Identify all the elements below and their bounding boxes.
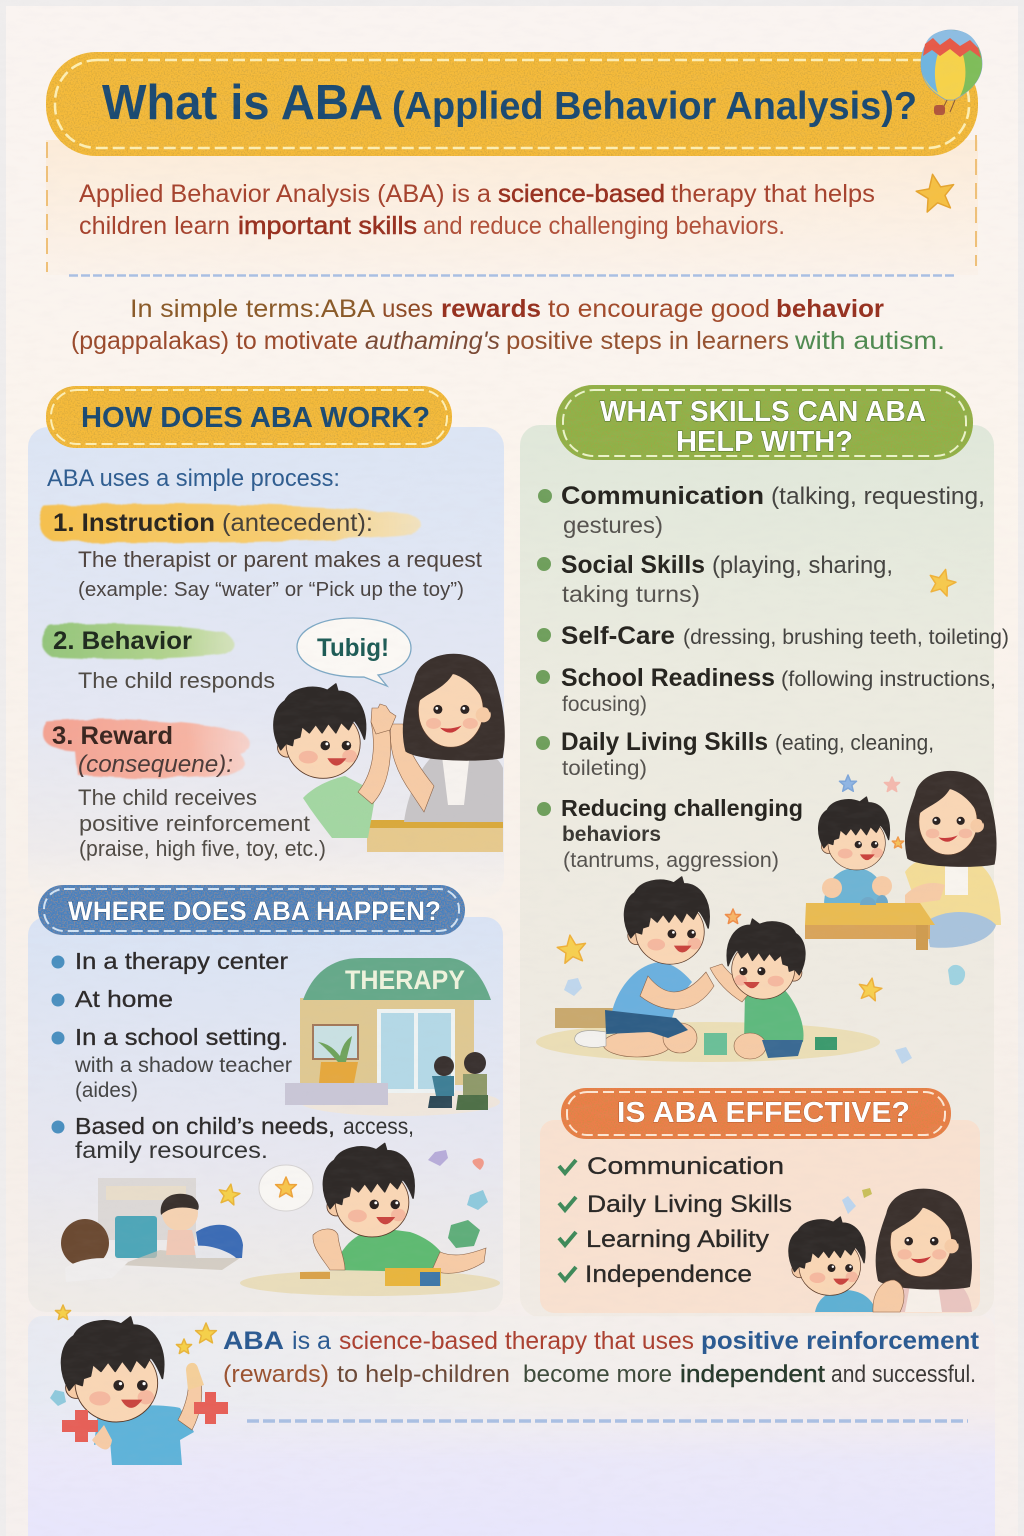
- simple terms text: rewards: [441, 295, 541, 323]
- icon: hot air balloon: [921, 30, 982, 115]
- list: locations: Based on child’s needs,: [75, 1113, 335, 1139]
- simple terms text: behavior: [776, 295, 884, 323]
- icon: star: [914, 171, 958, 213]
- list: skills: School Readiness: [561, 664, 775, 692]
- panel: conclusion: [28, 1305, 995, 1465]
- illustration: parent and child: [789, 1188, 972, 1312]
- simple terms text: (pgappalakas) to motivate: [71, 327, 358, 355]
- list: locations: access,: [343, 1113, 414, 1139]
- heading pill: skills: HELP WITH?: [676, 426, 853, 458]
- intro text: Applied Behavior Analysis (ABA) is a: [79, 180, 491, 208]
- step 3: reward: 3. Reward: [52, 722, 173, 750]
- icon: star: [926, 566, 958, 597]
- conclusion text: become more: [523, 1361, 672, 1388]
- step 3: reward: (praise, high five, toy, etc.): [79, 836, 326, 861]
- illustration: two children playing: [536, 877, 965, 1064]
- panel: how does ABA work: [28, 386, 505, 897]
- heading pill: effective: [561, 1088, 951, 1139]
- process intro: ABA uses a simple process:: [47, 465, 340, 492]
- conclusion text: positive reinforcement: [701, 1327, 980, 1355]
- simple terms text: authaming's: [365, 327, 500, 355]
- step 1: instruction: (example: Say “water” or “Pick up the toy”): [78, 579, 464, 601]
- intro text: important skills: [238, 212, 417, 240]
- step 2: behavior: The child responds: [78, 668, 275, 693]
- step 1: instruction: The therapist or parent makes a request: [78, 547, 482, 572]
- list: locations: In a school setting.: [75, 1024, 288, 1050]
- step 1: instruction: [39, 504, 482, 601]
- list: skills: Reducing challenging: [561, 795, 803, 821]
- list: skills: [536, 482, 1009, 872]
- title: (Applied Behavior Analysis)?: [392, 85, 917, 128]
- list: effective outcomes: [559, 1153, 792, 1288]
- panel: intro: [46, 135, 978, 276]
- illustration: therapy building: [285, 958, 500, 1116]
- step 3: reward: [42, 719, 326, 861]
- list: skills: Daily Living Skills: [561, 728, 768, 756]
- conclusion text: independent: [680, 1361, 825, 1388]
- conclusion text: science-based therapy that uses: [339, 1327, 694, 1355]
- title: What is ABA: [102, 76, 383, 130]
- illustration: high five: [274, 654, 505, 852]
- list: skills: taking turns): [562, 581, 700, 607]
- intro text: and reduce challenging behaviors.: [423, 212, 785, 240]
- conclusion text: (rewards): [223, 1361, 329, 1388]
- illustration: boy with puzzle pieces: [50, 1305, 228, 1465]
- conclusion text: to help-children: [337, 1361, 510, 1388]
- simple terms text: to encourage good: [548, 295, 770, 323]
- step 1: instruction: 1. Instruction: [53, 509, 215, 537]
- list: skills: (talking, requesting,: [771, 483, 985, 510]
- simple terms text: [71, 295, 945, 355]
- conclusion text: [223, 1327, 980, 1388]
- panel: what skills can ABA help with: [520, 385, 1009, 1317]
- illustration: playing boy: [240, 1144, 500, 1296]
- list: skills: toileting): [562, 757, 647, 780]
- step 2: behavior: 2. Behavior: [53, 627, 192, 655]
- step 3: reward: (consequene):: [78, 751, 233, 778]
- step 3: reward: positive reinforcement: [79, 811, 310, 836]
- panel: where does ABA happen: [28, 885, 503, 1312]
- conclusion text: ABA: [223, 1327, 284, 1355]
- step 2: behavior: [41, 624, 275, 693]
- heading pill: how does ABA work: [46, 386, 452, 448]
- heading pill: where does ABA happen: WHERE DOES ABA HAPPEN?: [68, 896, 441, 926]
- list: skills: (eating, cleaning,: [775, 730, 934, 755]
- list: skills: Communication: [561, 482, 764, 510]
- title banner: [46, 52, 978, 156]
- list: effective outcomes: Independence: [585, 1261, 752, 1288]
- list: skills: focusing): [562, 693, 647, 716]
- step 1: instruction: (antecedent):: [222, 509, 373, 537]
- heading pill: where does ABA happen: [38, 885, 465, 935]
- title: [102, 76, 917, 130]
- simple terms text: In simple terms:ABA: [130, 295, 375, 323]
- list: locations: [52, 948, 414, 1163]
- list: locations: family resources.: [75, 1137, 268, 1163]
- intro text: children learn: [79, 212, 230, 240]
- list: effective outcomes: Learning Ability: [586, 1226, 769, 1253]
- list: effective outcomes: Communication: [587, 1153, 784, 1180]
- heading pill: skills: WHAT SKILLS CAN ABA: [600, 396, 926, 428]
- heading pill: how does ABA work: HOW DOES ABA WORK?: [81, 402, 430, 434]
- speech bubble: Tubig: [297, 618, 411, 686]
- heading pill: skills: [556, 385, 973, 460]
- list: effective outcomes: Daily Living Skills: [587, 1191, 792, 1218]
- list: skills: Social Skills: [561, 551, 705, 579]
- illustration: therapy building: THERAPY: [345, 965, 465, 995]
- list: skills: (following instructions,: [781, 668, 996, 691]
- list: skills: (dressing, brushing teeth, toileting): [683, 626, 1009, 649]
- panel: is ABA effective: [540, 1088, 980, 1313]
- list: skills: (tantrums, aggression): [563, 849, 779, 872]
- illustration: children at home: [61, 1178, 243, 1282]
- list: skills: behaviors: [562, 823, 661, 846]
- list: skills: Self-Care: [561, 622, 675, 650]
- intro text: therapy that helps: [671, 180, 875, 208]
- intro text: science-based: [498, 180, 665, 208]
- heading pill: effective: IS ABA EFFECTIVE?: [617, 1097, 910, 1129]
- conclusion text: is a: [292, 1327, 331, 1355]
- list: locations: (aides): [75, 1079, 138, 1102]
- simple terms text: with autism.: [794, 327, 945, 355]
- list: skills: gestures): [563, 512, 663, 538]
- list: skills: (playing, sharing,: [712, 552, 893, 579]
- simple terms text: positive steps in learners: [506, 327, 789, 355]
- list: locations: In a therapy center: [75, 948, 288, 974]
- simple terms text: uses: [382, 295, 433, 323]
- list: locations: with a shadow teacher: [74, 1054, 292, 1077]
- conclusion text: and successful.: [831, 1361, 976, 1388]
- step 3: reward: The child receives: [78, 785, 257, 810]
- list: locations: At home: [75, 986, 173, 1012]
- speech bubble: Tubig: Tubig!: [317, 634, 389, 662]
- illustration: parent and child at table: [805, 771, 1001, 950]
- intro text: [79, 180, 875, 240]
